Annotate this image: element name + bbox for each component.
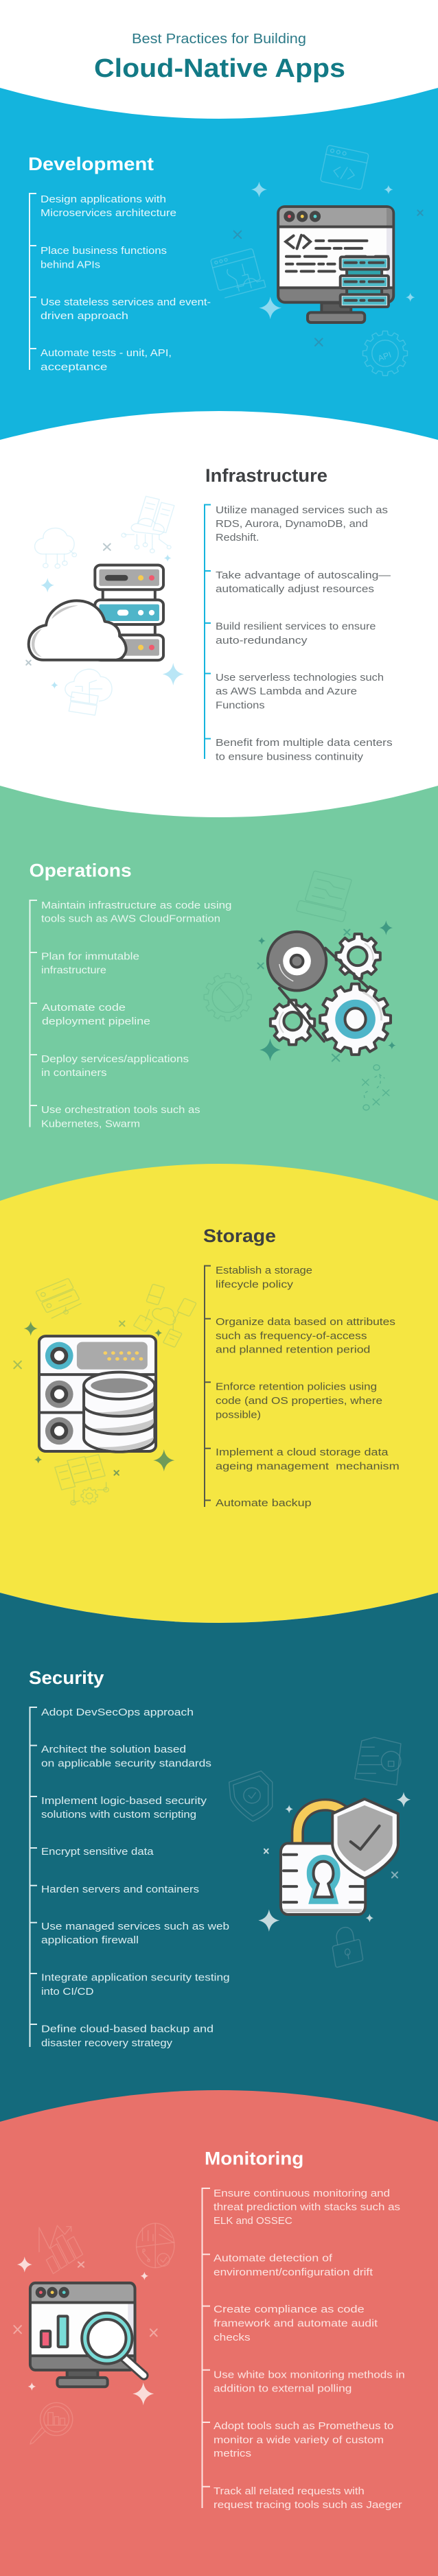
item [41,1921,229,1946]
large wheel [268,932,326,991]
item [41,1105,200,1129]
item: Implement a cloud storage data [216,1447,389,1458]
item: Integrate application security testing [41,1972,230,1983]
panel: development [0,88,438,440]
item: Functions [216,700,265,711]
icon: cloud and server rack [26,496,184,715]
icon: padlock and shield [229,1737,411,1967]
monitoring list [202,2188,405,2511]
item [216,1447,400,1472]
item: Use stateless services and event- [41,297,211,308]
item: deployment pipeline [42,1016,150,1027]
item: Automate tests - unit, API, [41,348,172,359]
decorative ghost icons [35,496,175,715]
item: Microservices architecture [41,208,176,219]
item [216,505,388,543]
sparkles [258,1792,411,1932]
monitor stand [67,2370,97,2378]
server box [39,1336,156,1451]
item: checks [214,2332,251,2343]
infrastructure heading: Infrastructure [205,465,327,486]
icon: monitor with code and decorations [211,145,423,375]
icon: storage server and database [14,1278,196,1505]
item: Redshift. [216,532,260,543]
item: Use white box monitoring methods in [214,2369,405,2380]
item [41,900,232,925]
item: Automate code [42,1003,126,1014]
decorative ghost icons [229,1737,401,1967]
item: code (and OS properties, where [216,1396,382,1407]
padlock [281,1805,365,1915]
item: Deploy services/applications [41,1054,189,1065]
small gear top right [336,934,380,979]
item: ageing management mechanism [216,1461,400,1472]
icon: monitor with magnifier [14,2223,174,2444]
large gear [320,984,391,1055]
item: Establish a storage [216,1265,312,1276]
operations list [30,900,232,1129]
item: solutions with custom scripting [41,1810,196,1820]
security heading: Security [29,1667,104,1688]
item [41,194,176,219]
item: such as frequency-of-access [216,1331,367,1342]
storage heading: Storage [203,1226,276,1246]
operations heading: Operations [30,860,132,881]
decorative ghost icons [36,1278,196,1505]
monitoring heading: Monitoring [205,2148,303,2169]
icon: gears and belt [204,869,396,1110]
item: disaster recovery strategy [41,2038,173,2049]
item: driven approach [41,311,128,322]
item: Define cloud-based backup and [41,2024,214,2035]
item: addition to external polling [214,2384,351,2395]
item [41,348,172,373]
small gear bottom left [270,1000,314,1044]
item: Use serverless technologies such [216,672,384,683]
item: monitor a wide variety of custom [214,2435,384,2446]
item: Benefit from multiple data centers [216,738,393,749]
item [42,1003,150,1027]
item: Use orchestration tools such as [41,1105,200,1116]
code lines [286,235,388,271]
item [214,2253,373,2278]
shield with check [332,1799,398,1878]
item [41,1054,189,1079]
item [216,570,391,595]
panel: storage [0,1164,438,1623]
item: as AWS Lambda and Azure [216,686,357,697]
item: Implement logic-based security [41,1796,207,1807]
panel: operations [0,786,438,1235]
security list [30,1707,230,2049]
item: Maintain infrastructure as code using [41,900,232,911]
magnifier [82,2313,144,2376]
operations background [0,786,438,1235]
sparkles [251,182,415,319]
item: Architect the solution based [41,1744,186,1755]
item [214,2188,400,2227]
storage list [205,1265,400,1509]
decorative ghost icons: API [377,350,393,364]
item: application firewall [41,1935,139,1946]
item [216,1265,312,1290]
cloud [29,600,126,660]
item: environment/configuration drift [214,2267,373,2278]
item: Ensure continuous monitoring and [214,2188,390,2199]
storage background [0,1164,438,1623]
item: Take advantage of autoscaling— [216,570,391,581]
item: Encrypt sensitive data [41,1847,154,1858]
item: into CI/CD [41,1987,93,1998]
item: Automate detection of [214,2253,333,2264]
belt [279,948,373,1041]
sparkles [41,554,184,689]
item: behind APIs [41,259,100,270]
monitoring background [0,2090,438,2576]
item: Design applications with [41,194,166,205]
item: tools such as AWS CloudFormation [41,914,220,925]
item [214,2304,378,2343]
item: infrastructure [41,965,106,976]
item [216,672,384,711]
item [41,1744,211,1770]
window buttons [37,2288,68,2297]
item: acceptance [41,362,107,373]
item: RDS, Aurora, DynamoDB, and [216,519,368,530]
database cylinder [84,1372,154,1452]
item: possible) [216,1409,261,1420]
panel: security [0,1593,438,2127]
item: Place business functions [41,246,167,257]
item: Adopt tools such as Prometheus to [214,2421,393,2432]
item: threat prediction with stacks such as [214,2202,400,2213]
item [216,1382,382,1420]
server stack [341,257,389,307]
panel: infrastructure [26,465,393,763]
item: Enforce retention policies using [216,1382,377,1393]
bar chart [41,2316,67,2347]
item: Plan for immutable [41,952,139,963]
item: auto-redundancy [216,635,308,646]
item: request tracing tools such as Jaeger [214,2500,402,2511]
panel: monitoring [0,2090,438,2576]
item: Utilize managed services such as [216,505,388,516]
item: Track all related requests with [214,2486,365,2497]
sparkles [24,1321,174,1471]
item: Harden servers and containers [41,1884,199,1895]
item: Organize data based on attributes [216,1317,395,1328]
monitor body [278,207,393,303]
security background [0,1593,438,2127]
item: in containers [41,1068,107,1079]
item: Automate backup [216,1498,312,1509]
server rack [95,565,163,660]
development list [30,194,211,373]
item: automatically adjust resources [216,584,374,595]
item [41,1796,207,1820]
item [216,738,393,763]
item: framework and automate audit [214,2319,378,2330]
item [216,622,376,646]
item [216,1317,395,1355]
item: Create compliance as code [214,2304,365,2315]
item [41,2024,214,2049]
item [41,1972,230,1998]
development background [0,88,438,440]
window buttons [285,212,319,221]
item: ELK and OSSEC [214,2216,292,2227]
sparkles [17,2257,154,2405]
item [214,2486,402,2511]
decorative ghost icons [30,2223,174,2444]
main title: Cloud-Native Apps [94,54,345,83]
item [214,2369,405,2395]
item: lifecycle policy [216,1279,294,1290]
monitor stand [321,303,351,312]
monitor body [30,2283,135,2370]
decorative ghost icons [204,869,356,1021]
item: on applicable security standards [41,1759,211,1770]
item [41,952,139,976]
item: metrics [214,2448,251,2459]
item: Build resilient services to ensure [216,622,376,633]
item [41,246,167,270]
item: and planned retention period [216,1344,370,1355]
item [214,2421,393,2459]
development heading: Development [28,154,154,174]
decorative ghost icons [211,145,407,375]
item: to ensure business continuity [216,752,364,763]
sparkles [258,920,396,1061]
infrastructure list [205,505,393,763]
subtitle: Best Practices for Building [132,32,306,47]
title [94,32,345,83]
item: Adopt DevSecOps approach [41,1707,194,1718]
item: Kubernetes, Swarm [41,1119,140,1129]
item: Use managed services such as web [41,1921,229,1932]
item [41,297,211,322]
